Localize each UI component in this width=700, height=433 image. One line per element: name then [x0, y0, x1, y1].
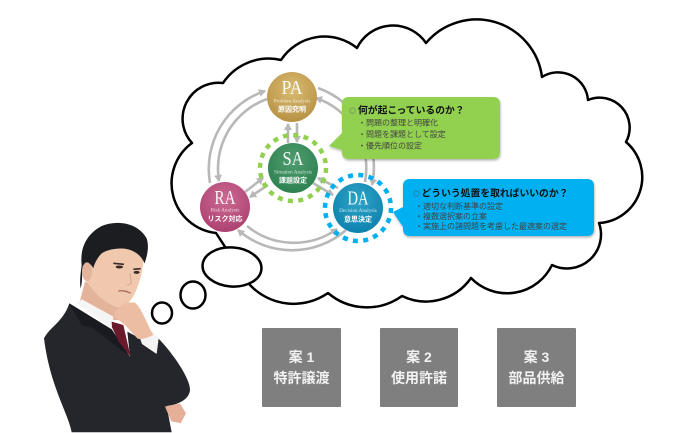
node: PA: PA: [282, 77, 303, 99]
thought bubble large: [201, 245, 263, 289]
callout: what is happening: ・問題を課題として設定: [358, 130, 446, 139]
thought bubble small: [152, 302, 172, 324]
option box 3: [497, 328, 576, 407]
node: SA with green dashed ring: SA: [282, 148, 304, 170]
callout: what action to take: ・複数選択案の立案: [415, 211, 487, 221]
callout: what action to take: ・適切な判断基準の設定: [415, 201, 503, 211]
node: DA with blue dashed ring: 意思決定: [344, 214, 372, 224]
callout: what is happening: ・問題の整理と明確化: [358, 118, 438, 128]
thought cloud: [152, 19, 642, 323]
callout: what is happening: 何が起こっているのか？: [358, 104, 465, 116]
option box 1: 特許譲渡: [274, 370, 330, 386]
node: RA: リスク対応: [208, 214, 242, 223]
node: PA: 原因究明: [278, 104, 306, 114]
callout: what action to take: [393, 179, 594, 236]
option box 2: [380, 328, 458, 407]
option box 2: 使用許諾: [391, 370, 447, 386]
option box 2: 案 2: [406, 349, 432, 365]
callout: what action to take: ・実施上の諸問題を考慮した最適案の選定: [415, 221, 567, 231]
option box 1: 案 1: [289, 349, 315, 365]
node: RA: [200, 182, 250, 232]
option box 3: 部品供給: [508, 370, 564, 386]
node: DA with blue dashed ring: Decision Analysis: [339, 208, 377, 214]
callout: what is happening: [329, 97, 500, 159]
node: PA: Problem Analysis: [274, 98, 310, 104]
node: SA with green dashed ring: [260, 135, 326, 201]
illustration: thinking businessman: [44, 223, 190, 432]
node: PA: [267, 72, 317, 122]
node: SA with green dashed ring: 課題設定: [279, 176, 307, 184]
option box 3: 案 3: [524, 349, 550, 365]
thought bubble medium: [180, 282, 206, 308]
node: RA: Risk Analysis: [211, 208, 239, 214]
cycle arrows: [209, 88, 374, 250]
callout: what is happening: ◎: [349, 107, 356, 115]
callout: what action to take: どういう処置を取ればいいのか？: [422, 186, 568, 200]
node: DA with blue dashed ring: DA: [348, 188, 369, 210]
callout: what action to take: ◎: [413, 190, 420, 198]
node: RA: RA: [214, 187, 236, 209]
node: DA with blue dashed ring: [325, 175, 391, 241]
callout: what is happening: ・優先順位の設定: [358, 140, 422, 150]
option box 1: [262, 328, 341, 407]
node: SA with green dashed ring: Situation Analysis: [274, 170, 312, 176]
